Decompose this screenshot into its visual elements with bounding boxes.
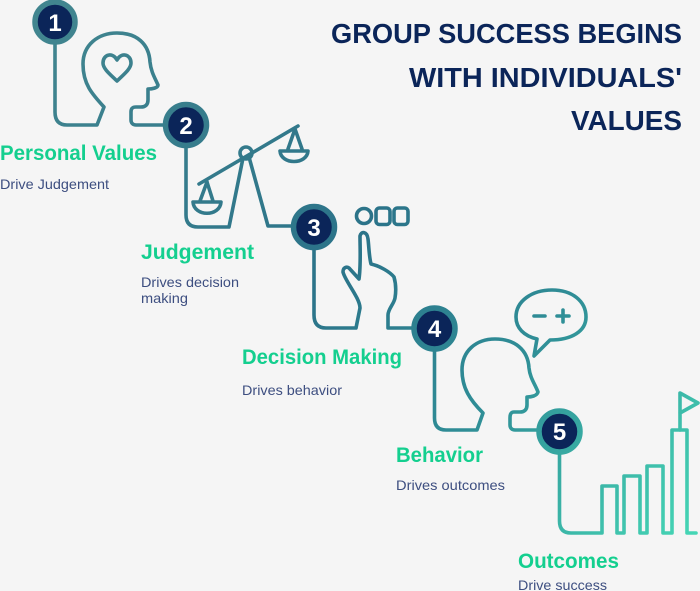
number badge 2: 2 — [179, 113, 193, 140]
icon: raised hand with options — [314, 208, 413, 328]
icon: rising bars with flag — [560, 393, 698, 533]
number badge 1 — [35, 2, 75, 42]
step 2: judgement — [141, 104, 308, 306]
number badge 3: 3 — [307, 215, 321, 242]
number badge 5 — [539, 411, 580, 452]
text: drives behavior: Drives behavior — [242, 382, 342, 398]
title: VALUES — [571, 105, 682, 136]
icon: head with heart — [55, 33, 165, 125]
icon: head with speech bubble — [434, 290, 586, 430]
step 3: decision making — [242, 206, 413, 398]
number badge 5: 5 — [553, 419, 566, 446]
title — [331, 18, 682, 136]
title: WITH INDIVIDUALS' — [409, 62, 682, 93]
number badge 4 — [414, 308, 455, 349]
heading: judgement: Judgement — [141, 241, 254, 264]
heading: behavior: Behavior — [396, 444, 483, 467]
step 5: outcomes — [518, 393, 698, 591]
title: GROUP SUCCESS BEGINS — [331, 18, 682, 49]
step 4: behavior — [396, 290, 586, 493]
step 1: personal values — [0, 2, 165, 192]
icon: balance scale — [186, 126, 308, 227]
heading: outcomes: Outcomes — [518, 550, 619, 573]
text: drive judgement: Drive Judgement — [0, 176, 109, 192]
number badge 3 — [294, 206, 334, 248]
text: drives decision making: making — [141, 290, 188, 306]
text: drives decision making: Drives decision — [141, 274, 239, 290]
number badge 4: 4 — [428, 316, 442, 343]
heading: decision making: Decision Making — [242, 346, 402, 369]
text: drives outcomes: Drives outcomes — [396, 477, 505, 493]
text: drives decision making — [141, 274, 239, 306]
number badge 1: 1 — [48, 10, 62, 37]
heading: personal values: Personal Values — [0, 142, 157, 165]
number badge 2 — [166, 104, 206, 146]
